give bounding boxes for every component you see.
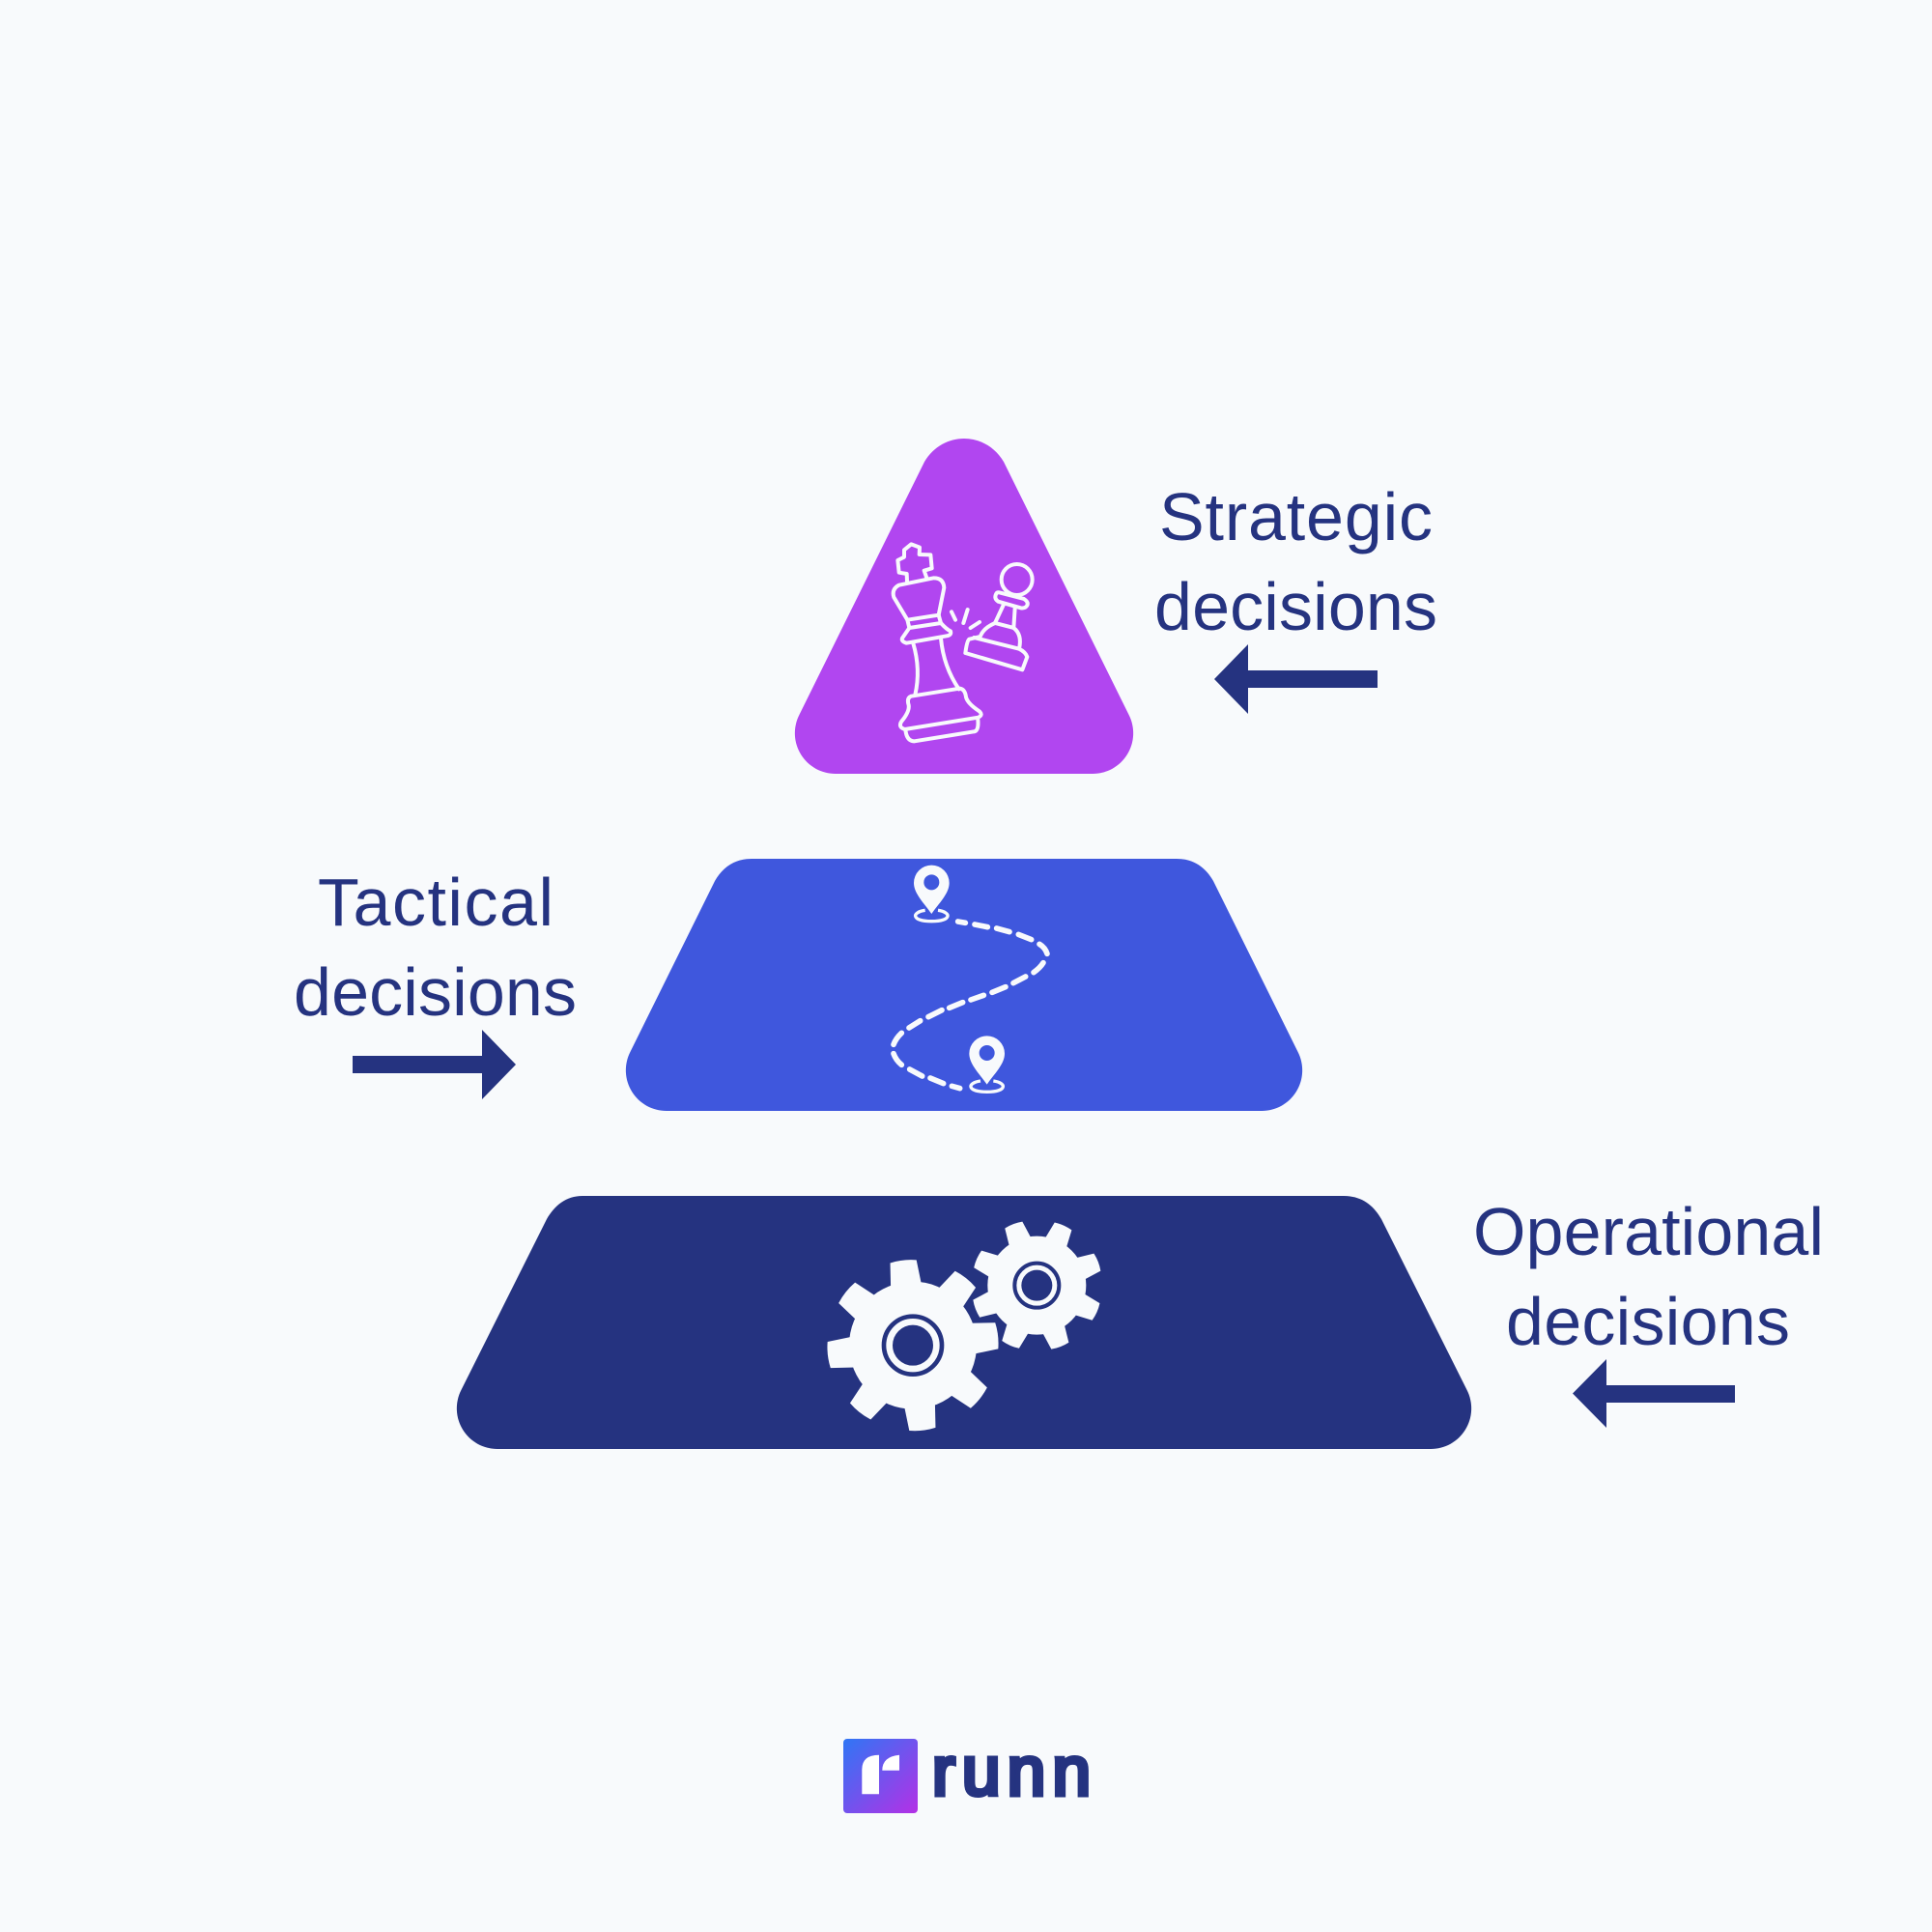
label: operational decisions: Operational <box>1473 1194 1824 1269</box>
label: strategic decisions: decisions <box>1154 569 1437 644</box>
label: tactical decisions: decisions <box>294 954 577 1030</box>
icon: chess king and pawn <box>894 544 1033 741</box>
label: operational decisions: decisions <box>1506 1284 1790 1359</box>
pyramid tier: operational <box>457 1196 1471 1449</box>
label: operational decisions <box>1473 1194 1824 1359</box>
logo: runn: runn <box>932 1734 1091 1810</box>
label: tactical decisions: Tactical <box>318 865 554 940</box>
pyramid tier: tactical <box>626 859 1302 1111</box>
arrow: operational, pointing left <box>1573 1359 1735 1428</box>
label: tactical decisions <box>294 865 577 1030</box>
label: strategic decisions: Strategic <box>1159 479 1433 554</box>
pyramid tier: strategic <box>795 439 1133 774</box>
icon: route between two map pins <box>894 866 1047 1092</box>
arrow: strategic, pointing left <box>1214 644 1378 714</box>
label: strategic decisions <box>1154 479 1437 644</box>
icon: two gears <box>826 1220 1102 1433</box>
arrow: tactical, pointing right <box>353 1030 516 1099</box>
logo: runn <box>843 1734 1091 1813</box>
